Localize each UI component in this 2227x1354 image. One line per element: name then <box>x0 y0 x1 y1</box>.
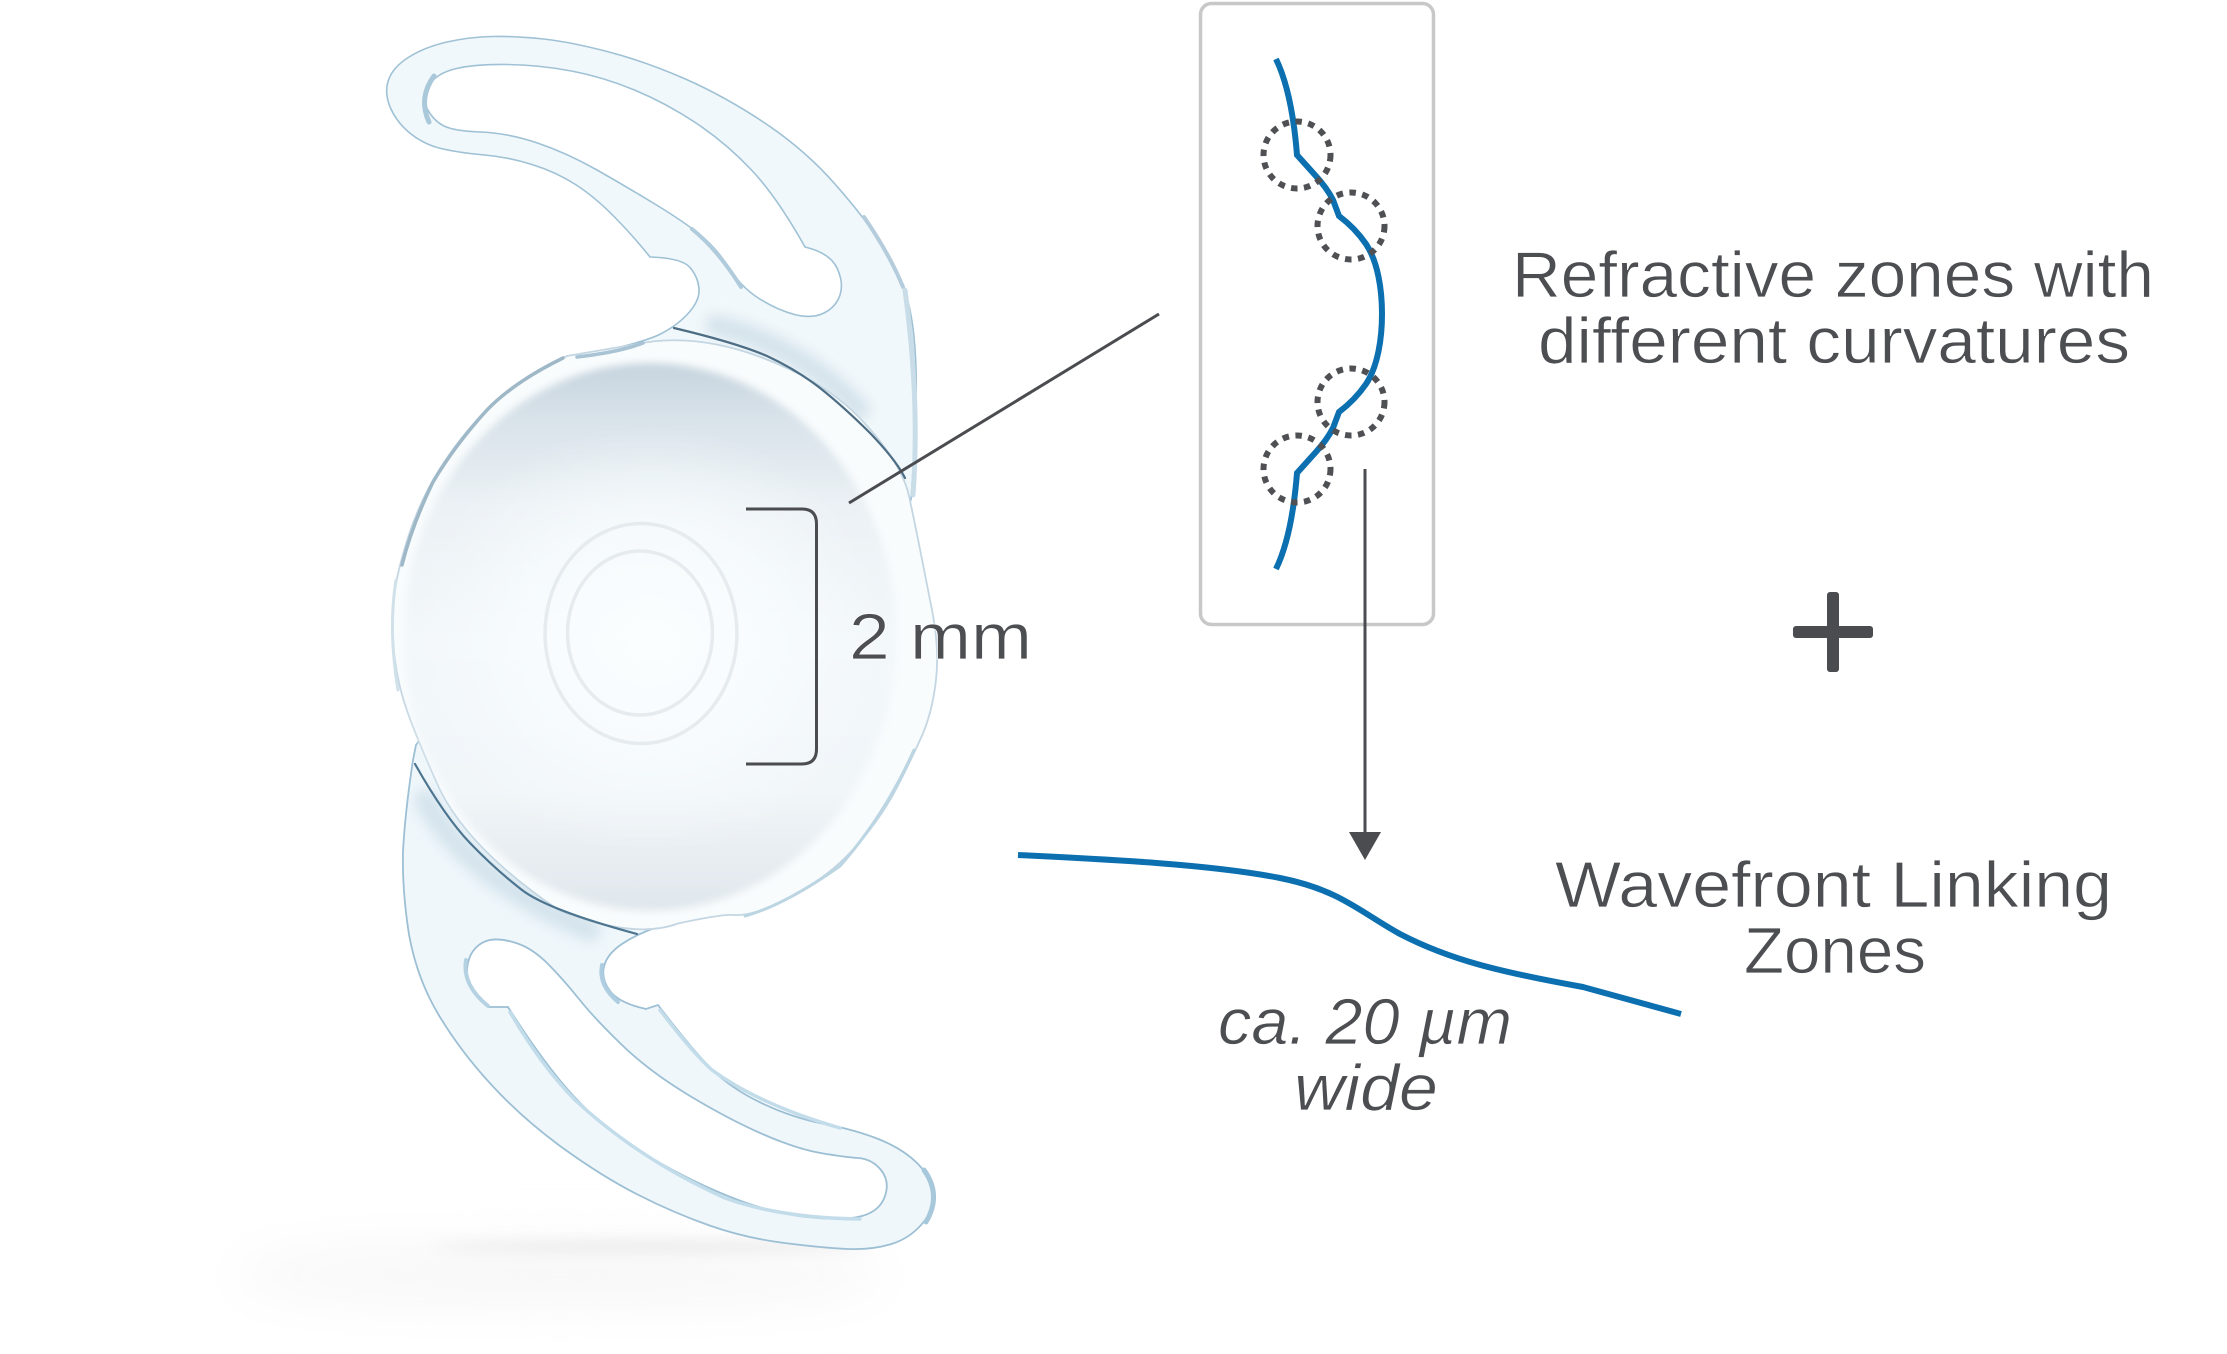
lens rim highlights <box>392 328 914 934</box>
blue wavefront linking curve <box>1018 855 1681 1014</box>
text: wavefront linking zones: Zones <box>1744 914 1926 987</box>
text: refractive zones: different curvatures <box>1538 304 2130 377</box>
inset frame <box>1200 4 1434 624</box>
bracket: 2 mm optic zone <box>746 509 816 764</box>
top haptic <box>387 36 916 500</box>
text: ca. 20 µm wide: ca. 20 µm <box>1218 985 1512 1058</box>
intraocular lens illustration <box>387 36 937 1249</box>
lens dish gradient <box>403 363 897 911</box>
lens shadow <box>230 1242 890 1303</box>
bottom haptic <box>403 700 935 1249</box>
text: ca. 20 µm wide <box>1218 985 1512 1124</box>
haptic shading <box>425 76 934 1222</box>
text: refractive zones <box>1512 238 2154 377</box>
lens optic body <box>392 340 937 929</box>
text: wavefront linking zones <box>1555 848 2112 987</box>
pointer line to inset <box>849 314 1159 503</box>
plus sign <box>1793 592 1873 672</box>
arrow from inset to wavefront curve <box>1349 469 1381 860</box>
text: refractive zones: Refractive zones with <box>1512 238 2154 311</box>
central refractive rings <box>545 524 737 744</box>
inset panel: refractive profile <box>1200 4 1434 624</box>
text: wavefront linking zones: Wavefront Linking <box>1555 848 2112 921</box>
dashed circles marking zone transitions <box>1264 122 1384 502</box>
text: ca. 20 µm wide: wide <box>1294 1051 1438 1124</box>
label: 2 mm: 2 mm <box>849 600 1032 673</box>
blue refractive profile curve <box>1276 59 1382 569</box>
lens center glow <box>412 425 888 855</box>
